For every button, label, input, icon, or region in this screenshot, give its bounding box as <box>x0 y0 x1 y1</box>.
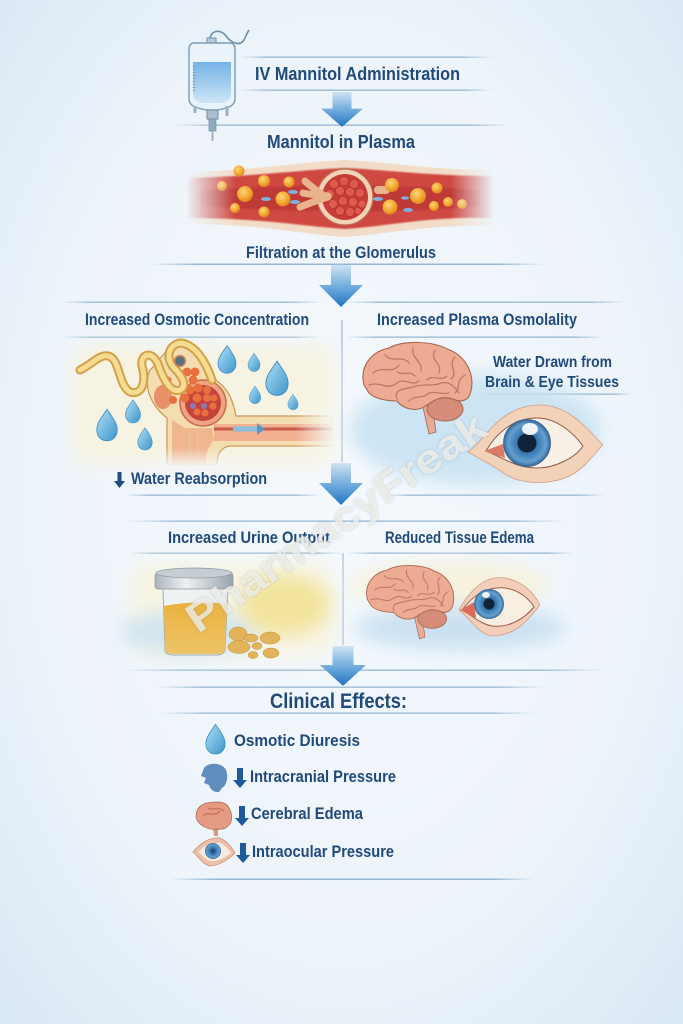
label: decreased Water Reabsorption: Water Reabsorption <box>131 470 267 488</box>
effect: Cerebral Edema: Cerebral Edema <box>251 805 364 823</box>
effect: Osmotic Diuresis <box>206 724 360 754</box>
effect: Intracranial Pressure: Intracranial Pressure <box>250 768 396 786</box>
illustration: brain and eye with reduced edema <box>350 561 565 650</box>
effect: Intraocular Pressure: Intraocular Pressure <box>252 843 394 861</box>
watermark: PharmacyFreak <box>177 403 495 641</box>
heading: Reduced Tissue Edema: Reduced Tissue Edema <box>385 529 535 547</box>
heading: Clinical Effects: Clinical Effects: <box>270 690 407 713</box>
effect: Intraocular Pressure <box>193 838 394 866</box>
heading: IV Mannitol Administration: IV Mannitol Administration <box>255 64 460 84</box>
effect: Osmotic Diuresis: Osmotic Diuresis <box>234 732 360 750</box>
text: Water Drawn from Brain & Eye Tissues: Brain & Eye Tissues <box>485 374 619 391</box>
heading: Filtration at the Glomerulus: Filtration at the Glomerulus <box>246 244 436 262</box>
heading: Increased Plasma Osmolality: Increased Plasma Osmolality <box>377 311 578 329</box>
arrow 3 <box>319 463 363 505</box>
icon: IV bag <box>189 30 249 141</box>
text: Water Drawn from Brain & Eye Tissues <box>485 354 619 391</box>
effect: Intracranial Pressure <box>201 764 396 792</box>
heading: Increased Osmotic Concentration: Increased Osmotic Concentration <box>85 311 309 329</box>
illustration: blood vessel with glomerulus <box>186 160 494 237</box>
heading: Mannitol in Plasma: Mannitol in Plasma <box>267 132 416 152</box>
illustration: urine cup and pills <box>120 562 335 658</box>
illustration: nephron with water drops <box>72 343 335 467</box>
illustration: brain and eye with water wash <box>350 342 603 485</box>
arrow 1 <box>321 92 363 127</box>
arrow 4 <box>320 646 366 686</box>
arrow 2 <box>319 265 363 307</box>
effect: Cerebral Edema <box>196 802 364 836</box>
heading: Increased Urine Output: Increased Urine Output <box>168 529 330 547</box>
text: Water Drawn from Brain & Eye Tissues: Water Drawn from <box>493 354 612 371</box>
